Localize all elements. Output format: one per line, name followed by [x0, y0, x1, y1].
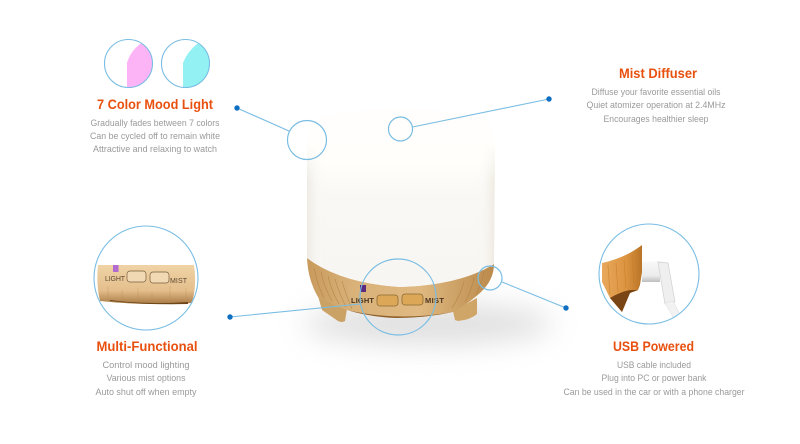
wood base: [307, 258, 494, 318]
control panel: MIST: [425, 296, 444, 305]
product: diffuser: [307, 150, 549, 354]
callout: USB port ring and leader: [478, 266, 569, 311]
heading block: USB Powered: USB Powered: [613, 338, 694, 354]
detail circle: control panel close-up: [94, 226, 198, 330]
white dome body: [307, 109, 495, 287]
detail circle: control panel close-up: LIGHT: [105, 276, 126, 283]
heading block: Mist Diffuser: Diffuse your favorite essential oils: [592, 87, 721, 98]
heading block: Mist Diffuser: Mist Diffuser: [619, 65, 697, 81]
heading block: Multi-Functional: Auto shut off when empty: [96, 387, 197, 398]
heading block: Multi-Functional: [96, 338, 198, 398]
control panel: LIGHT: [351, 296, 374, 305]
heading block: USB Powered: [564, 338, 744, 398]
heading block: USB Powered: Plug into PC or power bank: [602, 373, 707, 384]
icon: pink color circle: [104, 39, 154, 88]
heading block: 7 Color Mood Light: Attractive and relaxing to watch: [93, 144, 217, 155]
heading block: Mist Diffuser: Encourages healthier sleep: [604, 114, 708, 125]
heading block: 7 Color Mood Light: Gradually fades between 7 colors: [90, 118, 220, 129]
heading block: Mist Diffuser: Quiet atomizer operation at 2.4MHz: [586, 100, 726, 111]
heading block: Multi-Functional: Multi-Functional: [96, 338, 198, 354]
control panel: [351, 285, 444, 306]
heading block: 7 Color Mood Light: 7 Color Mood Light: [97, 96, 213, 112]
detail circle: control panel close-up: MIST: [170, 278, 188, 285]
heading block: USB Powered: Can be used in the car or with a phone charger: [564, 387, 744, 398]
callout: control panel ring and leader: [227, 259, 436, 335]
heading block: 7 Color Mood Light: [90, 96, 220, 155]
heading block: Mist Diffuser: [586, 65, 726, 125]
callout: top-left ring and leader: [234, 105, 326, 160]
callout: top-right ring and leader: [388, 96, 552, 141]
heading block: 7 Color Mood Light: Can be cycled off to remain white: [90, 131, 220, 142]
heading block: Multi-Functional: Control mood lighting: [102, 360, 190, 371]
heading block: Multi-Functional: Various mist options: [106, 373, 186, 384]
floor shadow: [303, 303, 553, 345]
heading block: USB Powered: USB cable included: [617, 360, 691, 371]
icon: cyan color circle: [160, 39, 210, 88]
detail circle: USB plug close-up: [599, 224, 699, 324]
left and right feet: [318, 296, 477, 322]
